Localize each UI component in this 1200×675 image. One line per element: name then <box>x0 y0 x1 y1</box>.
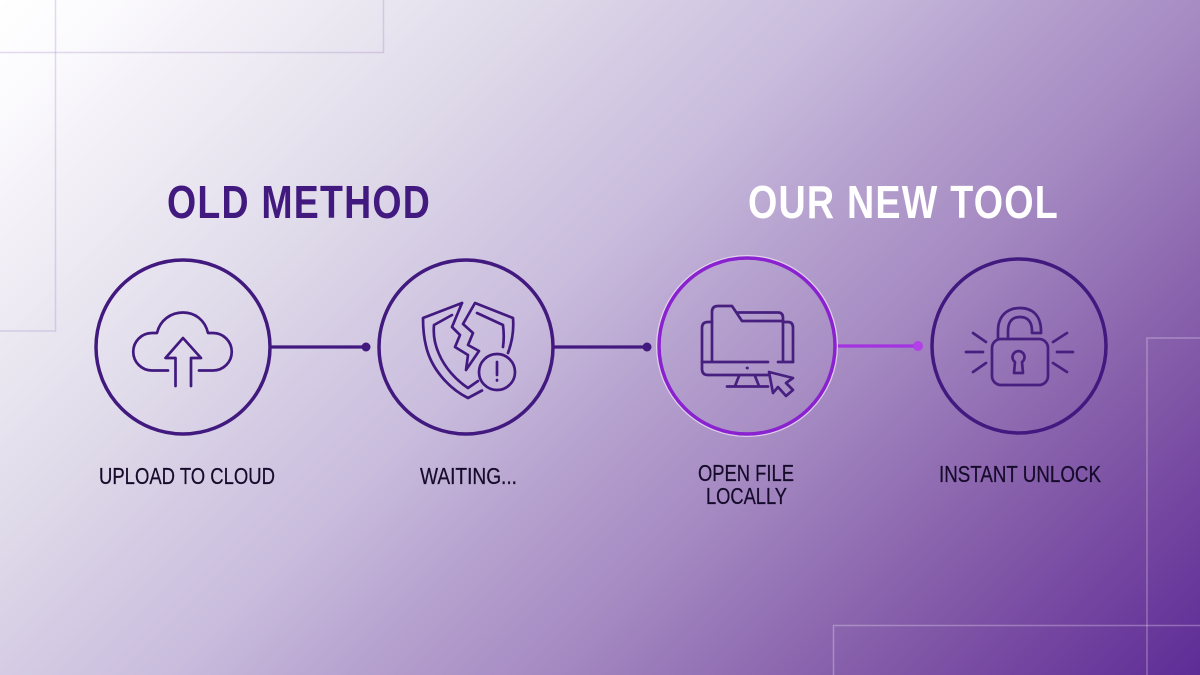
decorative frame: bottom right <box>834 338 1200 675</box>
step 2 ring <box>379 260 553 434</box>
connector: open file to unlock <box>837 341 923 351</box>
icon: cloud upload <box>133 312 232 386</box>
icon: broken shield with alert <box>423 303 515 398</box>
step 4: instant unlock <box>932 259 1106 487</box>
step 1 ring <box>96 260 270 434</box>
label: open file locally <box>698 460 794 509</box>
connector: waiting to open file <box>554 342 652 352</box>
step 3: open file locally <box>658 256 836 509</box>
icon: folder on monitor with cursor <box>702 306 793 396</box>
decorative frame: top left <box>0 0 384 331</box>
step 4 ring <box>932 259 1106 433</box>
label: upload to cloud: UPLOAD TO CLOUD <box>99 463 275 489</box>
step 3 ring <box>658 256 836 436</box>
step 1: upload to cloud <box>96 260 275 489</box>
label: instant unlock: INSTANT UNLOCK <box>939 461 1102 487</box>
label: waiting: WAITING... <box>420 463 517 489</box>
label line 2: LOCALLY <box>706 483 787 509</box>
connector: upload to waiting <box>271 342 370 352</box>
heading: old method: OLD METHOD <box>167 176 431 228</box>
label line 1: OPEN FILE <box>698 460 794 486</box>
icon: open padlock with rays <box>966 308 1073 385</box>
step 2: waiting <box>379 260 553 489</box>
heading: our new tool: OUR NEW TOOL <box>748 176 1059 228</box>
